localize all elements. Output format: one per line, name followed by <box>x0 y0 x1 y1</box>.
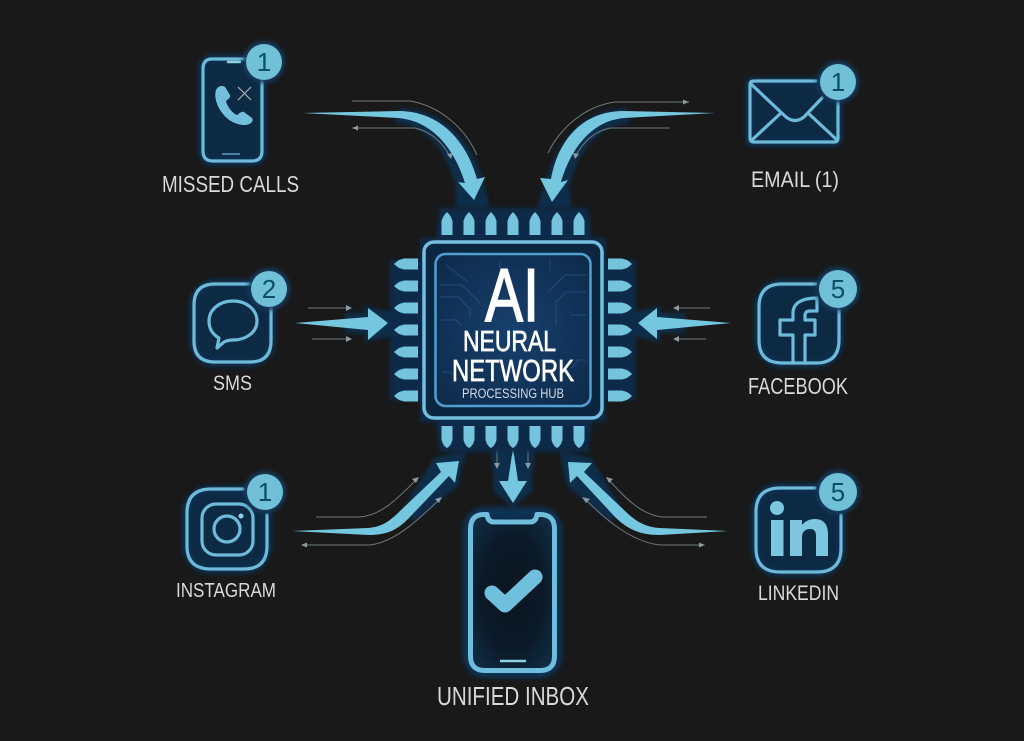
arrow: LinkedIn to hub <box>559 450 728 548</box>
subheading: processing hub: PROCESSING HUB <box>462 386 564 401</box>
output: unified inbox <box>437 512 589 711</box>
label: unified inbox: UNIFIED INBOX <box>437 681 589 711</box>
icon: phone with check mark <box>468 512 557 673</box>
badge: 1: 1 <box>831 67 845 97</box>
arrow: Instagram to hub <box>292 450 466 548</box>
badge: 2: 2 <box>262 274 276 304</box>
source: missed calls <box>162 41 299 197</box>
badge: 1 <box>243 41 285 83</box>
icon: speech bubble <box>193 283 272 363</box>
icon: envelope <box>749 81 839 143</box>
source: email <box>749 61 859 192</box>
arrow: email to hub <box>537 100 715 208</box>
source: Facebook <box>748 267 860 399</box>
chip inner frame <box>436 254 590 406</box>
arrow: missed calls to hub <box>302 101 490 208</box>
label: email: EMAIL (1) <box>751 167 839 192</box>
arrow: hub to unified inbox <box>491 448 535 508</box>
badge: 5: 5 <box>831 274 845 304</box>
heading: NEURAL: NEURAL <box>463 326 556 358</box>
heading: NETWORK: NETWORK <box>452 353 574 388</box>
label: SMS: SMS <box>213 372 252 395</box>
source: SMS <box>193 268 290 395</box>
icon: Instagram logo <box>186 489 268 570</box>
source: Instagram <box>176 471 286 602</box>
icon: Facebook logo <box>758 283 840 364</box>
icon: phone with missed call <box>202 58 263 162</box>
icon: LinkedIn logo <box>755 487 842 573</box>
badge: 1: 1 <box>257 47 271 77</box>
label: Facebook: FACEBOOK <box>748 373 849 399</box>
label: LinkedIn: LINKEDIN <box>758 582 839 605</box>
badge: 1: 1 <box>258 477 272 507</box>
heading: AI: AI <box>485 253 539 337</box>
chip outer frame <box>424 242 602 418</box>
label: missed calls: MISSED CALLS <box>162 171 299 197</box>
label: Instagram: INSTAGRAM <box>176 580 276 602</box>
badge: 5: 5 <box>831 477 845 507</box>
chip halo <box>390 208 636 452</box>
chip pins <box>394 212 632 448</box>
AI chip hub <box>390 208 636 452</box>
arrow: Facebook to hub <box>630 305 731 342</box>
circuit traces <box>440 260 586 380</box>
arrow: SMS to hub <box>295 305 395 342</box>
source: LinkedIn <box>755 470 860 605</box>
